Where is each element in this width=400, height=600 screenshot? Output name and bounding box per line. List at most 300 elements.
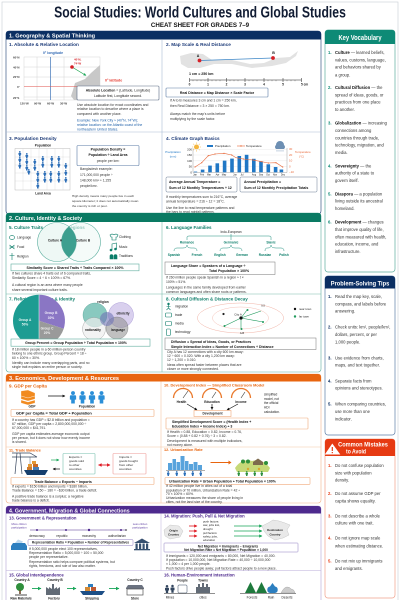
- chart: climate graph: Jun: [233, 174, 238, 176]
- diagram: GDP to population: Population: [79, 405, 95, 409]
- list: traits left: Food: [17, 245, 24, 249]
- text: location explanation: compared with another place.: [77, 112, 122, 116]
- vocab: culture: values, customs, language,: [335, 57, 386, 62]
- icon: warning triangle: [325, 444, 340, 454]
- text: climate note: [166, 195, 237, 214]
- diagram: language tree: French: [192, 253, 202, 257]
- text: diffusion note: closer or more strongly connected.: [167, 367, 219, 371]
- text: Bangladesh example: people/km².: [80, 184, 98, 188]
- vocab: sovereignty: 4.: [328, 163, 332, 168]
- heading: population density: 3. Population Density: [9, 136, 57, 141]
- text: GDP note: 67,000,000 = $41,791.: [12, 426, 46, 430]
- formula: representation ratio: [28, 540, 133, 546]
- title: Social Studies: World Cultures and Global Studies: [54, 3, 346, 21]
- list: diffusion channels: [166, 303, 191, 336]
- scale bar: 3: [244, 82, 246, 86]
- diagram: human environment: [164, 578, 296, 600]
- formula: net migration: [164, 543, 298, 552]
- vocab: diaspora: 5.: [328, 191, 332, 196]
- chart: climate graph: Feb: [200, 174, 205, 176]
- box: exports: to other: [69, 463, 80, 467]
- chart: climate graph: 150: [187, 153, 192, 157]
- text: urbanization note: [166, 484, 243, 504]
- text: location explanation: relative location to describe where a place is: [77, 107, 144, 111]
- diagram: migration flows: Country: [168, 532, 179, 536]
- chart: climate graph: Nov: [273, 174, 278, 176]
- formula: diffusion: Simple Interaction Index = Number of Connections ÷ Distance: [171, 345, 274, 349]
- tip 2: 1,000 people.: [335, 340, 360, 345]
- formula: annual precipitation: Sum of 12 Monthly Precipitation Totals: [244, 186, 308, 190]
- chart: population density grid: Population: [35, 144, 51, 148]
- text: representation note: [29, 547, 115, 568]
- list: diffusion channels: media: [175, 322, 184, 326]
- mistake 3: Do not describe a whole: [335, 513, 381, 518]
- chart: climate graph: Sep: [259, 174, 264, 176]
- chart: climate graph: [165, 141, 311, 176]
- icon: population people: [70, 391, 105, 404]
- diagram: identity venn: religion: [97, 300, 109, 304]
- text: development note: If Health = 0.88, Education = 0.82, Income = 0.76,: [167, 430, 242, 434]
- mistake 5: [328, 558, 382, 571]
- chart: climate graph: Apr: [216, 174, 220, 176]
- chart: latitude longitude map: 20°N: [13, 75, 19, 79]
- box: imports: goods bought: [119, 459, 138, 463]
- diagram: migration flows: education: [203, 538, 216, 542]
- icon: money stack: [21, 390, 35, 405]
- text: diffusion note: City A has 12 connections with a city 600 km away:: [167, 350, 244, 354]
- mistake 4: 4.: [328, 536, 332, 541]
- chart: climate graph: Aug: [252, 174, 257, 176]
- list: diffusion channels: technology: [175, 330, 191, 334]
- tip 4: 4.: [328, 378, 332, 383]
- text: location explanation: relative location: on the Atlantic coast of the: [77, 123, 142, 127]
- list: traits right: Traditions: [119, 254, 133, 258]
- diagram: migration flows: pull factors:: [203, 531, 218, 535]
- vocab: culture: [328, 50, 386, 77]
- panel: section 4 government: 4. Government, Migration & Global Connections: [9, 508, 130, 514]
- callout: absolute location formula: Absolute Location = (Latitude, Longitude): [86, 88, 150, 92]
- diagram: GDP to population: GDP: [29, 405, 36, 409]
- vocab: development: that improve quality of life,: [335, 227, 384, 232]
- formula: net migration: Net Migration = Immigrants − Emigrants: [198, 544, 258, 548]
- mistake 3: 3.: [328, 513, 332, 518]
- text: scale explanation: multiplying by the scale factor.: [170, 117, 215, 121]
- diagram: government spectrum: monarchy: [82, 534, 96, 538]
- diagram: migration flows: safety, jobs,: [203, 534, 218, 538]
- scale bar: [189, 72, 308, 86]
- mistake 2: capita shows equality.: [335, 498, 376, 503]
- vocab: globalization: technology, migration, and: [335, 143, 384, 148]
- scale bar: 0: [189, 82, 191, 86]
- formula: annual precipitation: [240, 177, 317, 192]
- text: migration note: If immigrants = 120,000 and emigrants = 80,000, Net Migration = 40,000.: [166, 554, 275, 558]
- diagram: government spectrum: democracy: [29, 534, 45, 538]
- text: Bangladesh example: Bangladesh example:: [80, 167, 113, 171]
- chart: population density grid: Land Area: [35, 192, 51, 196]
- diagram: human environment: cities: [199, 596, 207, 600]
- diagram: distance decay rings: [198, 303, 284, 335]
- formula: population density: Population Density =: [91, 148, 125, 152]
- text: development note: [167, 430, 242, 447]
- text: density note: the country is rich or poor.: [72, 204, 108, 208]
- text: scale explanation: then Real Distance = 3 × 250 = 750 km.: [170, 104, 230, 108]
- list: traits left: Religion: [17, 254, 29, 258]
- text: culture note: Similarity Score = 4 ÷ 6 × 100% ≈ 67%.: [12, 276, 71, 280]
- formula: real distance: [166, 88, 268, 97]
- tip 1: Read the map key, scale,: [335, 294, 382, 299]
- tip 1: 1.: [328, 294, 332, 299]
- text: urbanization note: If 42 million people live in cities out of a total: [166, 484, 232, 488]
- vocab: development: education, income, and: [335, 242, 379, 247]
- vocab: cultural diffusion: [328, 85, 384, 112]
- heading: government: 13. Government & Representation: [9, 516, 77, 520]
- chart: climate graph: 100: [187, 159, 192, 163]
- text: urbanization note: population of 70 million, Urbanization Rate = 42 ÷: [166, 488, 240, 492]
- mistake 4: [328, 536, 383, 548]
- chart: climate graph: 30: [289, 147, 293, 151]
- heading: global interdependence: 15. Global Interdependence: [9, 572, 64, 578]
- text: urbanization note: Urbanization measures the share of people living in: [166, 496, 243, 500]
- tip 5: indicator.: [335, 416, 352, 421]
- text: representation note: people per representative.: [29, 555, 68, 559]
- chart: latitude longitude map: 60°N: [13, 56, 19, 60]
- chart: climate graph: Jul: [240, 174, 244, 176]
- vocab: sovereignty: Sovereignty — the: [335, 163, 372, 168]
- tip 3: Use evidence from charts,: [335, 355, 384, 360]
- heading: urbanization: 12. Urbanization Rate: [164, 448, 203, 452]
- text: Bangladesh example: 148,000 km² ≈ 1,155: [80, 178, 111, 182]
- text: GDP note: [12, 418, 90, 444]
- diagram: language tree: English: [214, 253, 226, 257]
- text: trade note: trade balance is a deficit.: [12, 498, 50, 502]
- diagram: development gauges: [174, 388, 250, 416]
- diagram: language tree: Polish: [279, 253, 289, 257]
- heading: language families: 6. Language Families: [166, 225, 212, 230]
- mistake 4: when estimating distance.: [335, 543, 383, 548]
- vocab: culture: and behaviors shared by: [335, 65, 382, 70]
- chart: population density grid: [15, 144, 70, 196]
- text: representation note: rights, freedoms, and rule of law also matter.: [29, 564, 96, 568]
- heading: climate graph: 4. Climate Graph Basics: [166, 136, 220, 141]
- diagram: migration flows: Destination: [267, 528, 283, 532]
- mistake 2: Do not assume GDP per: [335, 491, 381, 496]
- vocab: diaspora: homeland.: [335, 206, 355, 211]
- text: diffusion note: Ideas often spread faster between places that are: [167, 363, 242, 367]
- mistake 2: 2.: [328, 491, 332, 496]
- tip 4: Separate facts from: [335, 378, 372, 383]
- heading: development index: 10. Development Index — Simplified Classroom Model: [164, 382, 264, 388]
- vocab: development: 6.: [328, 220, 332, 225]
- chart: latitude longitude map: 40°N,: [74, 58, 81, 62]
- vocab: sovereignty: [328, 163, 375, 183]
- formula: urbanization: Urbanization Rate = Urban Population ÷ Total Population × 100%: [169, 479, 277, 483]
- heading: trade balance: 11. Trade Balance: [9, 448, 41, 452]
- vocab: diaspora: [328, 191, 383, 211]
- text: urbanization note: cities, not the land size of the country.: [166, 500, 223, 504]
- text: culture note: share several important culture traits.: [12, 288, 68, 292]
- legend: town distance: far town: [299, 314, 309, 318]
- chart: latitude longitude map: 120°W: [20, 102, 29, 106]
- text: language note: [166, 276, 247, 294]
- chart: climate graph: (mm): [170, 154, 176, 158]
- tip 1: compass, and labels before: [335, 301, 387, 306]
- tip 2: dollars, percent, or per: [335, 332, 378, 337]
- vocab: culture: a group.: [335, 72, 350, 77]
- formula: language share: Language Share = Speakers of a Language ÷: [171, 264, 245, 268]
- chart: climate graph: 50: [189, 165, 192, 169]
- text: location explanation: Use absolute location for exact coordinates and: [77, 103, 149, 107]
- chart: latitude longitude map: 0° longitude: [43, 51, 63, 55]
- panel: common mistakes: Common Mistakes: [338, 442, 388, 449]
- chart: group pie: 20%: [44, 331, 50, 335]
- text: identity note: If 18 million people in a 60 million-person country: [12, 348, 86, 352]
- diagram: human environment: Rain: [268, 596, 275, 600]
- text: representation note: Representation Ratio = 5,000,000 ÷ 100 = 50,000: [29, 551, 104, 555]
- subtitle: CHEAT SHEET FOR GRADES 7–9: [151, 22, 250, 29]
- chart: climate graph: 200: [187, 147, 192, 151]
- chart: latitude longitude map: 74°W: [74, 62, 81, 66]
- text: density note: square kilometer; it does not automatically mean: [72, 199, 139, 203]
- diagram: language tree: German: [236, 253, 248, 257]
- text: scale explanation: Always match the map's units before: [170, 112, 225, 116]
- text: urbanization note: 70 × 100% = 60%.: [166, 492, 194, 496]
- mistake 1: [328, 463, 384, 483]
- chart: climate graph: Jan: [193, 174, 198, 176]
- tip 4: opinions and stereotypes.: [335, 386, 383, 391]
- text: language note: common languages and often share roots or patterns.: [166, 290, 247, 294]
- vocab: development: Development — changes: [335, 220, 384, 225]
- formula: population density: Population ÷ Land Area: [89, 153, 128, 157]
- diagram: language tree: Germanic: [224, 240, 239, 244]
- box: imports: [113, 454, 146, 474]
- formula: group percent: [11, 339, 150, 346]
- vocab: globalization: [328, 121, 388, 155]
- text: location explanation: Example: New York City ≈ (40°N, 74°W);: [77, 118, 138, 122]
- diagram: development gauges: Health: [177, 400, 186, 404]
- text: identity note: 60 × 100% = 30%.: [12, 356, 40, 360]
- tip 5: 5.: [328, 402, 332, 407]
- list: traits right: [110, 234, 133, 259]
- scale bar: 4: [263, 82, 265, 86]
- vocab: development: often measured with health,: [335, 234, 386, 239]
- diagram: rural to urban: [166, 456, 270, 476]
- formula: trade balance: [11, 478, 154, 484]
- diagram: government spectrum: authoritarian: [108, 534, 126, 538]
- text: GDP note: is shared.: [12, 440, 27, 444]
- vocab: globalization: 3.: [328, 121, 332, 126]
- text: language note: 100% ≈ 51%.: [166, 280, 186, 284]
- diagram: migration flows: Country: [269, 532, 281, 536]
- diagram: supply chain: [10, 578, 144, 600]
- diagram: government spectrum: participation: [11, 526, 27, 530]
- chart: climate graph: 0: [289, 164, 291, 168]
- vocab: culture: Culture — learned beliefs,: [335, 50, 385, 55]
- tip 1: answering.: [335, 308, 355, 313]
- diagram: migration flows: push factors:: [203, 520, 219, 524]
- diagram: distance decay rings: 0.5: [261, 304, 265, 308]
- diagram: migration flows: war, jobs lost,: [203, 523, 220, 527]
- chart: latitude longitude map: 60°W: [47, 102, 54, 106]
- text: language note: If 260 million people speak Spanish in a region ≈ t ×: [166, 276, 244, 280]
- list: traits right: Clothing: [119, 235, 131, 239]
- formula: similarity score: [11, 264, 139, 271]
- chart: climate graph: −10: [289, 170, 294, 174]
- diagram: development gauges: Development: [202, 412, 223, 416]
- note: simplified model: the official: [264, 401, 279, 405]
- map: points A and B: A: [197, 54, 200, 58]
- formula: net migration: Net Migration Rate = Net Migration ÷ Population × 1,000: [184, 548, 268, 552]
- diagram: migration flows: drought: [203, 527, 213, 531]
- panel: common mistakes: to Avoid: [346, 449, 367, 456]
- chart: climate graph: Mar: [207, 174, 211, 176]
- box: imports: countries: [119, 467, 132, 471]
- text: diffusion note: 12 ÷ 600 = 0.020. With a city 1,200 km away:: [167, 354, 235, 358]
- text: climate note: If monthly temperatures sum to 216°C, average: [166, 195, 237, 199]
- tip 5: use more than one: [335, 409, 371, 414]
- text: GDP note: 67 million, GDP per capita = 2,800,000,000,000 ÷: [12, 422, 86, 426]
- diagram: GDP to population: [21, 390, 105, 409]
- diagram: identity venn: nationality: [85, 328, 101, 332]
- diagram: distance decay rings: City A: [234, 312, 242, 316]
- formula: population density: people per km²: [97, 159, 120, 163]
- text: culture note: [12, 272, 91, 292]
- formula: development score: [166, 418, 308, 429]
- formula: diffusion: Diffusion = Spread of Ideas, Goods, or Practices: [171, 340, 251, 344]
- mistake 4: Do not ignore map scale: [335, 536, 381, 541]
- chart: climate graph: Temperature: [295, 150, 311, 154]
- note: simplified model: simplified: [264, 393, 278, 397]
- chart: climate graph: May: [222, 174, 227, 176]
- formula: average temperature: Sum of 12 Monthly Temperatures ÷ 12: [169, 186, 232, 190]
- text: migration note: × 1,000 = 4 per 1,000 people.: [166, 562, 211, 566]
- tip 2: Check units: km², people/km²,: [335, 325, 390, 330]
- chart: group pie: Group B: [45, 311, 58, 315]
- heading: religion ethnicity: 7. Religion, Ethnicity & Identity: [9, 296, 76, 302]
- mistake 1: Do not confuse population: [335, 463, 384, 468]
- text: GDP note: GDP per capita estimates average economic output: [12, 432, 90, 436]
- tip 5: When comparing countries,: [335, 402, 386, 407]
- diagram: human environment: People: [177, 578, 188, 582]
- box: imports: from other: [119, 463, 133, 467]
- formula: GDP per capita: GDP per Capita = Total GDP ÷ Population: [16, 410, 92, 416]
- vocab: culture: 1.: [328, 50, 332, 55]
- diagram: human environment: Towns: [198, 578, 208, 582]
- mistake 3: [328, 513, 381, 526]
- icon: ballot box: [11, 540, 27, 550]
- vocab: diaspora: Diaspora — a population: [335, 191, 383, 196]
- chart: climate graph: Precipitation: [165, 150, 181, 154]
- list: diffusion channels: migration: [175, 304, 188, 308]
- icon: cargo ship and crane: [12, 453, 48, 475]
- formula: annual precipitation: Annual Precipitation =: [244, 180, 281, 184]
- text: identity note: belong to one ethnic group, Group Percent = 18 ÷: [12, 352, 87, 356]
- mistake 1: 1.: [328, 463, 332, 468]
- text: identity note: Identity can include many overlapping parts, and no: [12, 361, 90, 365]
- diagram: language tree: Romance: [180, 240, 194, 244]
- chart: climate graph: Precipitation: [215, 144, 231, 148]
- diagram: distance decay rings: A-B: [240, 331, 244, 335]
- diagram: government spectrum: More citizen: [11, 522, 27, 526]
- tip 2: 2.: [328, 325, 332, 330]
- vocab: globalization: countries through trade,: [335, 135, 379, 140]
- diagram: culture venn: Culture A: [48, 238, 63, 242]
- diagram: government spectrum: participation: [132, 526, 148, 530]
- text: GDP note: per person, but it does not show how evenly income: [12, 436, 90, 440]
- chart: climate graph: Oct: [266, 174, 270, 176]
- tip 5: [328, 402, 386, 421]
- scale bar: 5 cm: [301, 82, 308, 86]
- diagram: identity venn: language: [111, 328, 125, 332]
- diagram: supply chain: Country B: [47, 578, 63, 582]
- arrow: trade double: [98, 464, 110, 466]
- diagram: language tree: Russian: [259, 253, 271, 257]
- chart: climate graph: 20: [289, 153, 293, 157]
- formula: group percent: Group Percent = Group Population ÷ Total Population × 100%: [25, 341, 128, 345]
- diagram: language tree: Spanish: [168, 253, 180, 257]
- tip 4: [328, 378, 383, 391]
- heading: absolute and relative location: 1. Absolute & Relative Location: [9, 42, 79, 47]
- text: migration note: Push factors drive people away; pull factors attract people to a new place.: [166, 566, 277, 570]
- formula: GDP per capita: [11, 410, 154, 416]
- formula: population density: [77, 146, 139, 166]
- heading: GDP per capita: 9. GDP per Capita: [9, 384, 47, 388]
- text: diffusion note: [167, 350, 244, 371]
- chart: latitude longitude map: 30°W: [60, 102, 67, 106]
- text: GDP note: If a country has GDP = $2.8 trillion and population =: [12, 418, 90, 422]
- list: traits right: Music: [119, 245, 128, 249]
- heading: human environment: 16. Human-Environment Interaction: [164, 572, 235, 578]
- tip 2: [328, 325, 390, 345]
- text: location explanation: northeastern United States.: [77, 127, 118, 131]
- chart: latitude longitude map: [13, 51, 122, 106]
- tip 3: maps, and text together.: [335, 363, 380, 368]
- panel: section 2 culture: [6, 213, 321, 372]
- tip 1: [328, 294, 387, 313]
- box: exports: Exports =: [69, 455, 82, 459]
- text: density note: [72, 194, 139, 208]
- text: identity note: [12, 348, 90, 369]
- box: exports: goods sold: [69, 459, 84, 463]
- diagram: human environment: Mines: [166, 596, 175, 600]
- text: location explanation: [77, 103, 149, 131]
- formula: language share: [165, 262, 275, 274]
- vocab: cultural diffusion: Cultural Diffusion — the: [335, 85, 383, 90]
- scale bar: 2: [226, 82, 228, 86]
- mistake 1: density.: [335, 478, 349, 483]
- text: scale explanation: If A to B measures 3 cm and 1 cm = 250 km,: [170, 98, 237, 102]
- diagram: human environment: Forests: [247, 596, 258, 600]
- list: traits left: [9, 236, 31, 260]
- formula: language share: Total Population × 100%: [209, 269, 250, 273]
- text: identity note: single trait explains an entire person or society.: [12, 365, 82, 369]
- formula: average temperature: Average Annual Temperature =: [169, 180, 220, 184]
- formula: diffusion: [165, 338, 316, 350]
- mistake 5: and emigrants.: [335, 566, 363, 571]
- diagram: migration flows: Origin: [169, 528, 178, 532]
- text: development note: not money alone.: [167, 443, 193, 447]
- panel: section 4 government: [6, 506, 321, 600]
- diagram: culture venn: [38, 222, 100, 262]
- vocab: development: [328, 220, 386, 254]
- text: culture note: If two cultures share 4 traits out of 6 compared traits,: [12, 272, 91, 276]
- box: imports: Imports =: [119, 455, 132, 459]
- diagram: supply chain: Country A: [14, 578, 30, 582]
- text: climate note: annual temperature = 216 ÷ 12 = 18°C.: [166, 200, 225, 204]
- list: traits left: Language: [17, 236, 31, 240]
- heading: migration: 14. Migration: Push, Pull & Net Migration: [164, 514, 245, 518]
- panel: section 1 geography: 1. Geography & Spatial Thinking: [9, 34, 96, 40]
- diagram: language tree: Indo-European: [220, 230, 242, 234]
